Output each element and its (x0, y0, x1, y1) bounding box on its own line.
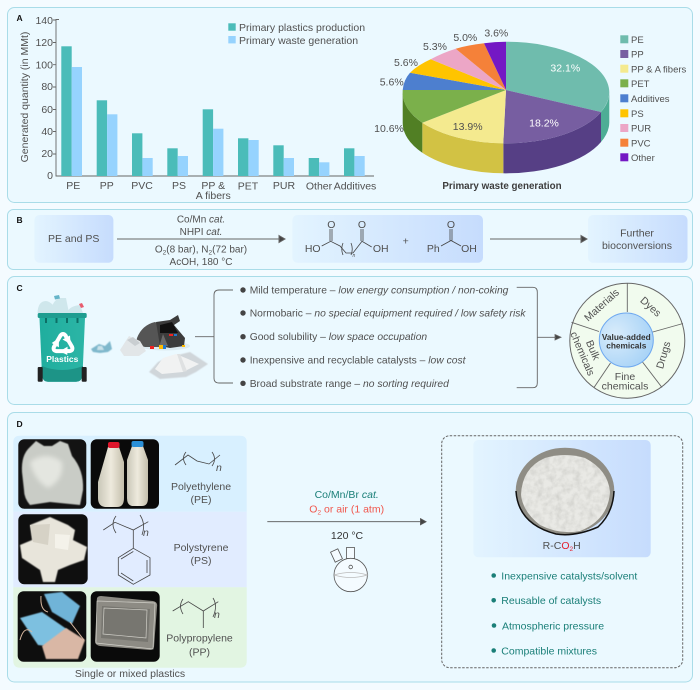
structure: polyethylene: n (216, 462, 222, 474)
pie legend: Other (631, 153, 655, 164)
arrow: to product (267, 519, 426, 525)
bar chart legend: Primary waste generation (239, 35, 358, 47)
icon: crumpled bottle (91, 341, 112, 353)
label: polystyrene (174, 542, 229, 567)
pie legend: PE (631, 35, 644, 46)
pie percentage labels: 13.9% (453, 121, 483, 133)
segment labels: Bulk (583, 338, 602, 363)
connector line (195, 336, 214, 338)
arrow: to bioconversions (490, 236, 587, 242)
segment labels: Materials (582, 287, 622, 324)
advantage 3: Good solubility – low space occupation (250, 332, 427, 343)
structure: polypropylene: n (214, 609, 220, 621)
product box (dashed) (442, 436, 683, 668)
photo: plastic bag (18, 439, 86, 509)
benefit 4: Compatible mixtures (501, 645, 597, 657)
reaction conditions: 2 (163, 249, 167, 256)
y axis tick labels (35, 15, 53, 182)
advantage 4: Inexpensive and recyclable catalysts – low cost (250, 356, 467, 366)
box: PE and PS: PE and PS (48, 233, 99, 245)
segment labels: chemicals (567, 330, 597, 378)
hub label: chemicals (606, 340, 647, 350)
panel letter C: C (16, 283, 23, 293)
x axis labels: Other (306, 180, 333, 192)
x axis labels (66, 180, 376, 202)
pie percentage labels (374, 27, 580, 135)
segment labels: Drugs (654, 340, 673, 370)
hub label (602, 332, 651, 350)
reaction conditions: 2 (317, 509, 321, 516)
benefit 1: Inexpensive catalysts/solvent (501, 570, 637, 582)
photo: foam blocks (18, 514, 88, 584)
reaction conditions: (72 bar) (212, 244, 247, 255)
y axis tick labels: 140 (35, 15, 53, 27)
y axis tick labels: 0 (47, 170, 53, 182)
reaction conditions: (8 bar), N (166, 244, 208, 255)
y axis tick labels: 100 (35, 60, 53, 72)
panel letter D: D (16, 419, 23, 429)
panel letter A: A (16, 13, 23, 23)
reaction conditions: 120 °C (331, 530, 364, 542)
pie legend: PP & A fibers (631, 64, 687, 75)
label: polyethylene: (PE) (190, 494, 212, 506)
panel D: mixed plastics oxidation (8, 412, 692, 682)
label: polypropylene: Polypropylene (166, 633, 233, 645)
pie percentage labels: 5.3% (423, 41, 447, 53)
segment labels: chemicals (602, 380, 648, 392)
pie legend: PET (631, 79, 650, 90)
wheel dividers (572, 283, 683, 388)
structure: dicarboxylic acid: O (358, 219, 366, 231)
x axis labels: A fibers (196, 190, 231, 202)
pie legend: PVC (631, 138, 651, 149)
production bars (61, 46, 354, 176)
photo: plastic bottles (91, 439, 159, 509)
bar chart legend: Primary plastics production (239, 22, 365, 34)
pie legend (620, 35, 687, 164)
pie legend: Additives (631, 94, 670, 105)
reaction conditions: O (155, 244, 163, 255)
x axis labels: PET (238, 180, 259, 192)
advantage 2: Normobaric – no special equipment required / low safety risk (250, 308, 526, 320)
y axis tick labels: 120 (35, 37, 53, 49)
structure: dicarboxylic acid: HO (305, 243, 321, 255)
pie percentage labels: 3.6% (484, 27, 508, 39)
pie percentage labels: 5.6% (394, 57, 418, 69)
right bracket (517, 287, 537, 388)
structure: polypropylene (173, 598, 220, 628)
pie percentage labels: 32.1% (550, 62, 580, 74)
y axis tick labels: 80 (41, 81, 53, 93)
label: polypropylene: (PP) (189, 647, 210, 659)
advantages list (240, 286, 526, 390)
panel letter B: B (16, 215, 23, 225)
label: polystyrene: Polystyrene (174, 542, 229, 554)
bin label: Plastics (46, 354, 79, 364)
row: polystyrene (13, 512, 247, 587)
reaction conditions: NHPI cat. (180, 227, 222, 238)
product image panel (473, 440, 651, 557)
structure: dicarboxylic acid: O (327, 219, 335, 231)
structure: polyethylene (175, 452, 222, 474)
bar chart legend (228, 22, 365, 47)
label: polyethylene (171, 481, 231, 506)
y axis title: Generated quantity (in MMt) (19, 32, 31, 162)
structure: benzoic acid: O (447, 219, 455, 231)
row: polyethylene (13, 436, 247, 512)
photo: face masks (18, 591, 86, 662)
x axis labels: PVC (131, 180, 153, 192)
pie title: Primary waste generation (442, 181, 562, 192)
pie percentage labels: 5.0% (453, 32, 477, 44)
product formula: H (573, 540, 581, 552)
pie legend: PP (631, 50, 644, 61)
x axis labels: PE (66, 180, 80, 192)
x axis labels: PP (100, 180, 114, 192)
structure: benzoic acid: OH (461, 243, 477, 255)
structure: polystyrene (103, 515, 150, 584)
pie side walls (403, 92, 609, 173)
box: further bioconversions (588, 215, 688, 263)
structure: benzoic acid: Ph (427, 243, 440, 255)
segment labels (567, 287, 673, 392)
pie legend: PUR (631, 124, 651, 135)
pie top slices (403, 42, 609, 143)
x axis labels: PS (172, 180, 186, 192)
reaction conditions: Co/Mn/Br cat. (315, 489, 379, 501)
wheel: value-added chemicals (567, 283, 685, 398)
segment labels: Dyes (637, 295, 663, 320)
row: polypropylene (13, 587, 247, 668)
advantage 1: Mild temperature – low energy consumption / non-coking (250, 286, 509, 296)
reaction conditions (155, 215, 247, 268)
icon: two-neck flask (331, 548, 367, 592)
product formula: R-CO (543, 540, 570, 552)
label: polyethylene: Polyethylene (171, 481, 231, 493)
reaction conditions: Co/Mn cat. (177, 215, 225, 226)
hub label: Value-added (602, 332, 651, 342)
y axis tick labels: 20 (41, 148, 53, 160)
label: polystyrene: (PS) (190, 555, 212, 567)
benefit 3: Atmospheric pressure (502, 620, 604, 632)
reaction conditions: AcOH, 180 °C (170, 257, 232, 268)
segment labels: Fine (615, 371, 635, 383)
icon: trash bags and foam waste (120, 315, 208, 379)
plus sign: + (403, 236, 409, 248)
reaction conditions: 2 (208, 249, 212, 256)
pie legend: PS (631, 109, 644, 120)
chart axes (53, 20, 374, 176)
reaction conditions (309, 489, 384, 542)
photo: white powder dish (516, 448, 614, 535)
icon: recycling symbol (50, 334, 76, 357)
hub circle (599, 313, 653, 367)
photo: plastic tray (91, 591, 160, 662)
icon: plastics recycling bin (38, 295, 87, 382)
advantage 5: Broad substrate range – no sorting required (250, 379, 449, 390)
y axis tick labels: 40 (41, 126, 53, 138)
reaction conditions: O (309, 503, 317, 515)
bar chart (19, 15, 376, 202)
3D pie chart (374, 27, 609, 192)
box: further bioconversions: Further (620, 228, 654, 240)
structure: dicarboxylic acid: OH (373, 243, 389, 255)
structure: dicarboxylic acid: n (352, 253, 356, 259)
structure: benzoic acid (427, 219, 477, 255)
x axis labels: Additives (334, 180, 376, 192)
x axis labels: PUR (273, 180, 296, 192)
pie percentage labels: 10.6% (374, 123, 404, 135)
reaction conditions: or air (1 atm) (321, 503, 384, 515)
panel B: oxidation process (8, 210, 692, 270)
pie percentage labels: 18.2% (529, 118, 559, 130)
product formula: 2 (570, 546, 574, 553)
box: further bioconversions: bioconversions (602, 240, 672, 252)
y axis tick labels: 60 (41, 104, 53, 116)
arrow: to acid products (117, 236, 285, 242)
box: acid products (292, 215, 483, 263)
left bracket (214, 290, 233, 383)
x axis labels: PP & (201, 180, 225, 192)
caption: single or mixed plastics: Single or mixed plastics (75, 668, 185, 680)
structure: dicarboxylic acid (305, 219, 389, 259)
waste bars (72, 67, 365, 176)
panel A: plastics quantities (8, 8, 692, 202)
benefit 2: Reusable of catalysts (501, 595, 601, 607)
pie percentage labels: 5.6% (380, 77, 404, 89)
box: PE and PS (34, 215, 113, 263)
arrow: to value-added chemicals (537, 334, 561, 340)
structure: polystyrene: n (143, 527, 149, 539)
label: polypropylene (166, 633, 233, 659)
panel C: advantages (8, 276, 692, 404)
